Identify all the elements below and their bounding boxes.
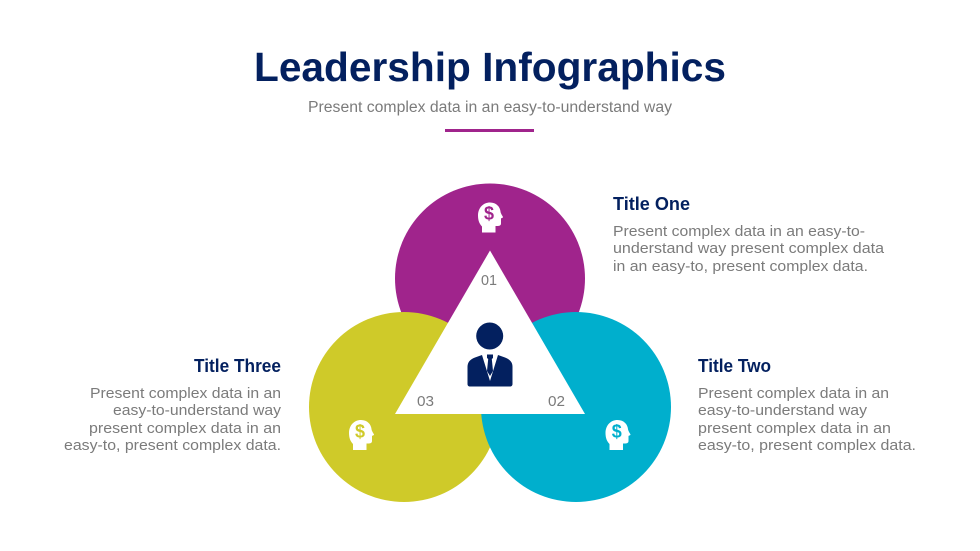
circle: purple <box>395 184 585 374</box>
body: title three: present complex data in an <box>89 421 281 437</box>
venn diagram <box>309 184 671 502</box>
text block: title two <box>698 356 916 454</box>
title underline <box>445 129 534 132</box>
title: Leadership Infographics <box>254 44 726 90</box>
circle: blue <box>481 312 671 502</box>
body: title two: easy-to-understand way <box>698 403 868 419</box>
body: title three: Present complex data in an <box>90 386 281 402</box>
body: title two: Present complex data in an <box>698 386 889 402</box>
body: title two: present complex data in an <box>698 421 891 437</box>
text block: title one <box>613 194 885 275</box>
central triangle <box>395 250 585 414</box>
body: title three: easy-to, present complex data. <box>64 438 281 454</box>
icon: head with dollar, yellow <box>349 420 374 450</box>
number 02: 02 <box>548 393 565 410</box>
heading: title two: Title Two <box>698 356 771 376</box>
body: title three <box>64 386 282 454</box>
icon: businessman <box>468 322 512 386</box>
body: title one: understand way present complex data <box>613 241 885 257</box>
body: title two <box>698 386 916 454</box>
subtitle: Present complex data in an easy-to-understand way <box>308 99 672 116</box>
number 03: 03 <box>417 393 434 410</box>
circle: yellow <box>309 312 499 502</box>
body: title three: easy-to-understand way <box>113 403 282 419</box>
icon: head with dollar, blue <box>606 420 630 450</box>
icon: head with dollar, purple <box>478 202 503 232</box>
body: title one: Present complex data in an easy-to- <box>613 224 865 240</box>
icon: head with dollar, purple: $ <box>484 204 494 224</box>
body: title two: easy-to, present complex data. <box>698 438 916 454</box>
body: title one <box>613 224 885 275</box>
text block: title three <box>64 356 282 454</box>
heading: title three: Title Three <box>194 356 281 376</box>
heading: title one: Title One <box>613 194 690 214</box>
body: title one: in an easy-to, present complex data. <box>613 259 868 275</box>
number 01: 01 <box>481 272 497 289</box>
icon: head with dollar, yellow: $ <box>355 422 365 442</box>
icon: head with dollar, blue: $ <box>612 422 622 442</box>
